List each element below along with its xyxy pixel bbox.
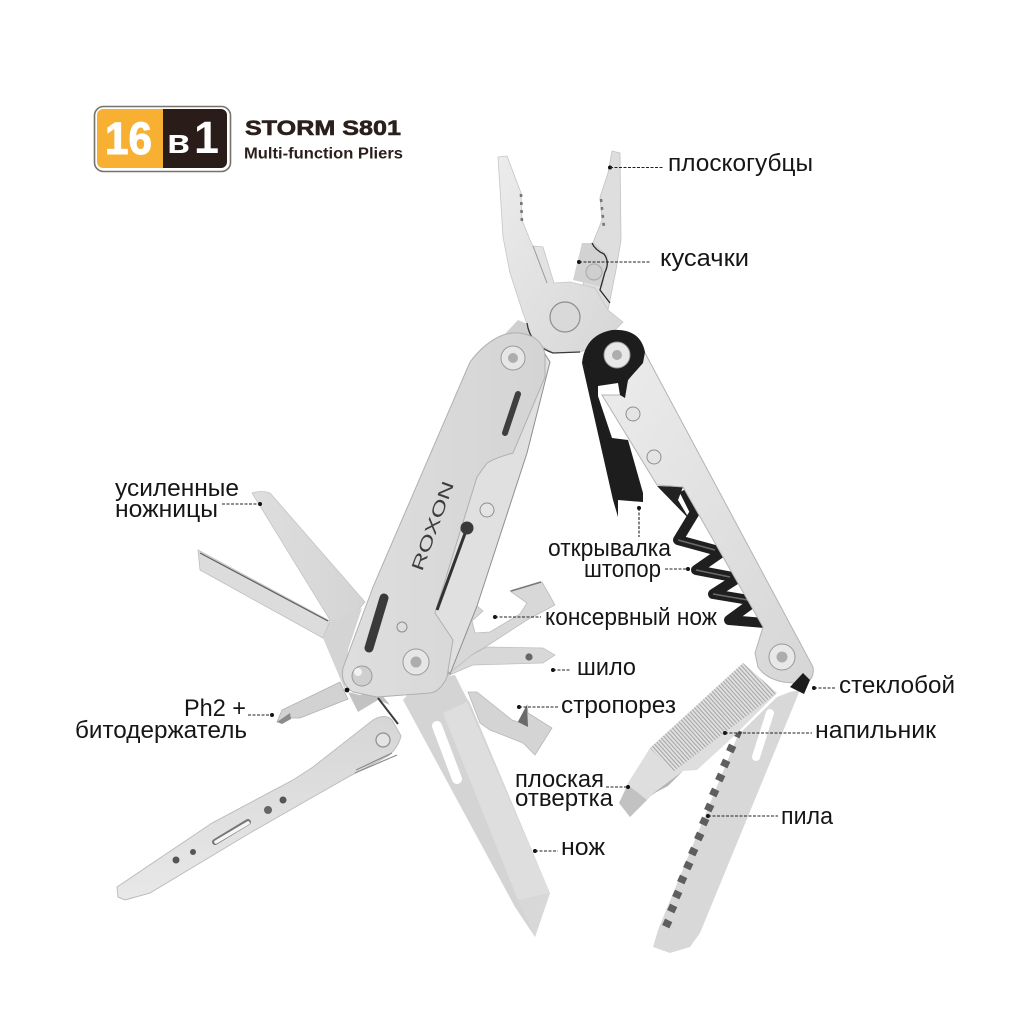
pliers wire cutter (573, 243, 610, 303)
right handle screws and rivets (604, 342, 795, 670)
label: плоскогубцы: плоскогубцы (668, 150, 813, 177)
tool: long serrated rod (117, 716, 401, 900)
label: шило (551, 654, 636, 681)
left handle back plate (425, 340, 550, 674)
file and flat screwdriver (619, 663, 777, 817)
pliers jaw: right (580, 151, 621, 310)
tool: Ph2 bit holder (277, 682, 398, 724)
tool: reinforced scissors (198, 492, 365, 690)
label: штопор: штопор (584, 556, 661, 583)
left handle slots (369, 394, 518, 648)
opener and black liner (582, 363, 643, 517)
label: усиленные ножницы (115, 475, 262, 523)
black pivot head (582, 330, 645, 398)
label: кусачки: кусачки (660, 245, 749, 272)
label: пила (706, 803, 833, 830)
label: нож: нож (561, 834, 606, 861)
left handle rivets and screws (345, 346, 525, 692)
label: стеклобой: стеклобой (839, 672, 955, 699)
label: усиленные ножницы: ножницы (115, 496, 218, 523)
label: нож (533, 834, 606, 861)
label: плоская отвертка: отвертка (515, 785, 613, 812)
label: плоская отвертка: плоская (515, 766, 604, 793)
logo text: product name (244, 116, 403, 162)
saw blade (653, 690, 800, 953)
label: Ph2 + битодержатель: битодержатель (75, 717, 247, 744)
label: открывалка (548, 506, 671, 562)
label: плоская отвертка (515, 766, 630, 812)
logo: 16 в 1 badge (94, 106, 230, 172)
label: Ph2 + битодержатель: Ph2 + (184, 695, 246, 722)
logo: 16 в 1 badge: в (167, 123, 190, 161)
tool: can opener (447, 582, 555, 675)
corkscrew (657, 486, 765, 623)
pliers jaw: left (498, 156, 623, 353)
pliers underside behind handle (503, 320, 540, 345)
label: напильник (723, 717, 936, 744)
label: пила: пила (781, 803, 833, 830)
glass breaker (790, 673, 810, 694)
label: усиленные ножницы: усиленные (115, 475, 239, 502)
logo text: product name: STORM S801 (245, 116, 401, 140)
left handle front plate (342, 333, 545, 697)
pliers pivot (550, 302, 580, 332)
ROXON logotype: ROXON (408, 479, 458, 573)
label: открывалка: открывалка (548, 535, 671, 562)
label: напильник: напильник (815, 717, 936, 744)
label: шило: шило (577, 654, 636, 681)
multitool illustration (117, 151, 813, 953)
logo: 16 в 1 badge: 1 (194, 112, 219, 163)
left handle (342, 333, 550, 697)
tool: awl (447, 647, 555, 676)
label: Ph2 + битодержатель (75, 695, 274, 744)
tool: knife blade (403, 675, 550, 937)
logo: 16 в 1 badge: 16 (105, 113, 152, 164)
right handle plate (602, 353, 813, 684)
label: стропорез: стропорез (561, 692, 676, 719)
tool: strap cutter (468, 692, 552, 755)
label: консервный нож: консервный нож (545, 604, 718, 631)
logo text: product name: Multi-function Pliers (244, 146, 403, 162)
label: кусачки (577, 245, 749, 272)
